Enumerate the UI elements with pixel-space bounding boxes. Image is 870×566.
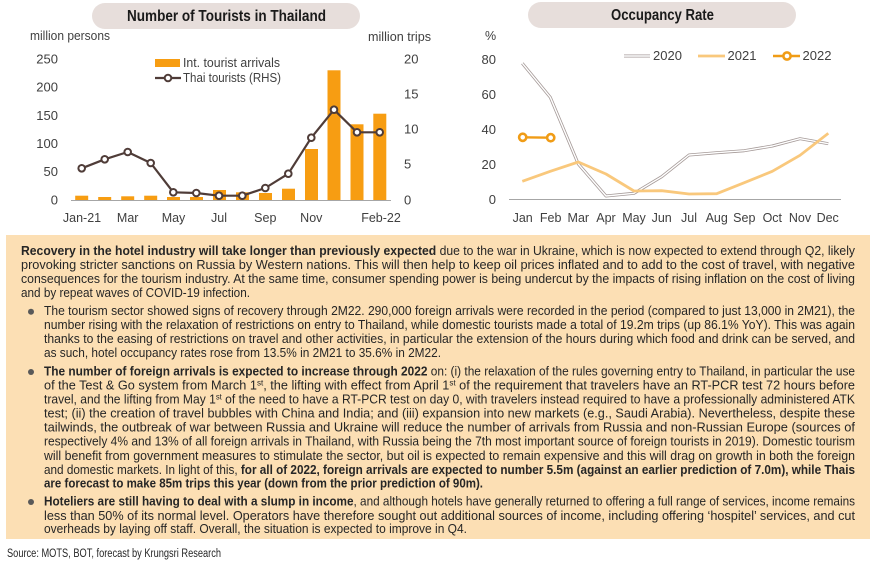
left axis ticks [36, 52, 58, 208]
x axis labels: Jan-21 [63, 211, 101, 225]
panel: commentary [6, 235, 870, 539]
x axis labels: Mar [117, 211, 138, 225]
line: 2021 [522, 133, 828, 194]
legend [155, 56, 281, 85]
bullet: foreign arrivals forecast: will benefit from government measures to stimulate the sector, but oil is expected to remain expensive and this will drag on growth in both the foreign [43, 449, 855, 463]
bullet: tourism sector recovery [28, 304, 855, 360]
x axis labels: Feb-22 [361, 211, 401, 225]
y axis ticks: 60 [482, 87, 496, 102]
y axis ticks: 80 [482, 52, 496, 67]
x axis labels: Jul [211, 211, 227, 225]
right axis ticks: 20 [404, 52, 418, 66]
y axis unit: % [485, 29, 496, 43]
right axis ticks: 15 [404, 86, 418, 102]
right axis ticks: 10 [404, 122, 418, 136]
bullet: foreign arrivals forecast: of the need to have a RT-PCR test on day 0, with travelers instead required to have a professionally administered ATK [222, 392, 856, 406]
bullet: foreign arrivals forecast: test; (ii) the creation of travel bubbles with China and India; and (iii) expansion into new markets (e.g., Saudi Arabia). Nevertheless, despite these [44, 406, 855, 420]
x axis labels: Sep [254, 211, 276, 225]
text block: intro paragraph [21, 244, 856, 300]
legend: 2021 [728, 48, 756, 63]
legend: 2022 [802, 48, 831, 63]
left axis ticks: 200 [36, 80, 58, 94]
line: Thai tourists (RHS) [78, 106, 383, 199]
text block: intro paragraph: provoking stricter sanctions on Russia by Western nations. This will then help to keep oil prices inflated and to add to the cost of travel, with negative [21, 258, 855, 272]
bullet: tourism sector recovery: as such, hotel occupancy rates rose from 13.5% in 2M21 to 35.6% in 2M22. [44, 346, 441, 360]
bullet: foreign arrivals forecast: are forecast to make 85m trips this year (down from the prior prediction of 90m). [44, 476, 483, 490]
x axis labels: Apr [596, 211, 616, 225]
x axis labels: Nov [300, 211, 323, 225]
right axis title: million trips [368, 30, 431, 44]
bullet: hoteliers income slump: overheads by laying off staff. Overall, the situation is expected to improve in Q4. [44, 522, 467, 536]
bullet: foreign arrivals forecast: of the Test & Go system from March 1 [44, 378, 255, 392]
legend [624, 48, 831, 63]
x axis labels: Oct [763, 211, 783, 225]
line: 2022 [519, 134, 554, 141]
heading pill: Occupancy Rate [528, 2, 796, 28]
x axis labels: Mar [568, 211, 589, 225]
x axis labels: Feb [540, 211, 562, 225]
left axis ticks: 100 [36, 136, 58, 151]
text block: intro paragraph: consequences for the tourism industry. At the same time, consumer spending power is being undercut by the impacts of rising inflation on the cost of living [21, 272, 855, 286]
left axis ticks: 250 [36, 52, 58, 66]
bars: international tourist arrivals [75, 70, 386, 200]
x axis labels: Sep [733, 211, 755, 225]
bullet: foreign arrivals forecast: The number of foreign arrivals is expected to increase through 2022 on: (i) the relaxation of the rules governing entry to Thailand, in particular the use [44, 365, 855, 379]
right axis ticks: 0 [404, 192, 411, 208]
x axis labels [63, 211, 401, 225]
y axis ticks [482, 52, 496, 207]
text block: intro paragraph: and by repeat waves of COVID-19 infection. [21, 286, 250, 300]
x axis labels [513, 211, 839, 225]
line: 2020 [522, 63, 828, 196]
bullet: foreign arrivals forecast: st [449, 378, 456, 388]
heading pill: Number of Tourists in Thailand: Number of Tourists in Thailand [127, 8, 326, 25]
x axis labels: May [162, 211, 186, 225]
source note: Source: MOTS, BOT, forecast by Krungsri Research [7, 548, 221, 560]
bullet: foreign arrivals forecast: , the lifting with effect from April 1 [263, 378, 449, 392]
x axis labels: Nov [789, 211, 812, 225]
right axis ticks: 5 [404, 156, 411, 172]
x axis line [509, 198, 841, 200]
y axis ticks: 0 [489, 192, 496, 207]
left axis ticks: 50 [44, 164, 58, 179]
y axis ticks: 40 [482, 122, 496, 137]
legend: Int. tourist arrivals [183, 56, 280, 70]
bullet: foreign arrivals forecast: tailwinds, the outbreak of war between Russia and Ukraine will reduce the number of arrivals from Russia and non-Russian Europe (sources of [44, 421, 856, 435]
bullet: foreign arrivals forecast: st [257, 378, 264, 388]
bullet: foreign arrivals forecast: st [216, 392, 223, 402]
bullet: tourism sector recovery: number rising with the relaxation of restrictions on entry to Thailand, while domestic tourists made a total of 19.2m trips (up 86.1% YoY). This was again [44, 318, 855, 332]
chart: occupancy rate [482, 2, 841, 225]
x axis labels: Jun [652, 211, 672, 225]
left axis ticks: 0 [51, 192, 58, 208]
bullet: foreign arrivals forecast: of the requirement that travelers have an RT-PCR test 72 hours before [456, 378, 855, 392]
left axis ticks: 150 [36, 108, 58, 123]
chart: number of tourists in Thailand [30, 3, 431, 225]
x axis labels: May [622, 211, 647, 225]
legend: 2020 [653, 48, 682, 63]
bullet: hoteliers income slump [28, 495, 856, 536]
x axis labels: Jan [513, 211, 533, 225]
heading pill: Number of Tourists in Thailand [92, 3, 360, 29]
bullet: hoteliers income slump: less than 50% of its normal level. Operators have therefore sought out additional sources of income, including offering ‘hospitel’ services, and cut [44, 509, 856, 523]
x axis labels: Dec [817, 211, 839, 225]
x axis labels: Jul [681, 211, 697, 225]
right axis ticks [404, 52, 418, 208]
bullet: hoteliers income slump: Hoteliers are still having to deal with a slump in income, and although hotels have generally returned to offering a full range of services, income remains [44, 495, 855, 509]
legend: Thai tourists (RHS) [183, 71, 281, 85]
x axis line [71, 200, 391, 202]
left axis title: million persons [30, 29, 110, 43]
y axis ticks: 20 [482, 157, 496, 172]
bullet: foreign arrivals forecast: travel, and the lifting from May 1 [44, 392, 223, 406]
heading pill: Occupancy Rate: Occupancy Rate [611, 7, 714, 24]
x axis labels: Aug [706, 211, 728, 225]
bullet: tourism sector recovery: thanks to the easing of restrictions on travel and other activities, in particular the extension of the hours during which food and drink can be served, and [44, 332, 855, 346]
bullet: foreign arrivals forecast [28, 365, 856, 490]
text block: intro paragraph: Recovery in the hotel industry will take longer than previously expected due to the war in Ukraine, which is now expected to extend through Q2, likely [21, 244, 856, 258]
bullet: tourism sector recovery: The tourism sector showed signs of recovery through 2M22. 290,000 foreign arrivals were recorded in the period (compared to just 13,000 in 2M21), the [44, 304, 855, 318]
